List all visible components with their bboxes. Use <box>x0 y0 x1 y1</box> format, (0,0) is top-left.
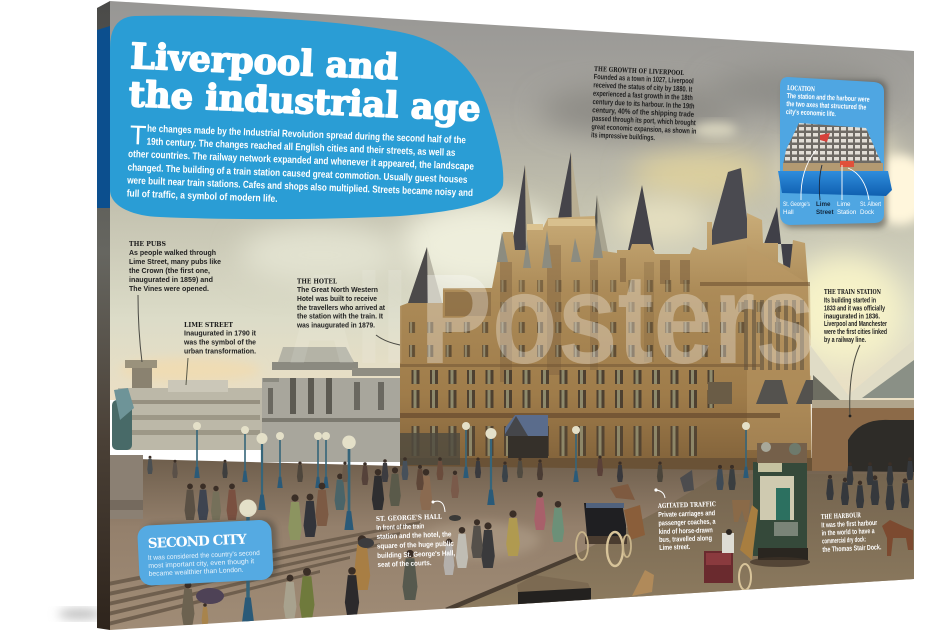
horses <box>610 470 913 596</box>
text block: agitated traffic: Private carriages and <box>658 508 715 519</box>
introduction text: 19th century. The changes reached all English cities and their streets, as well as <box>146 137 456 159</box>
location text: city's economic life. <box>786 107 836 118</box>
second city text <box>148 550 261 578</box>
text block: the growth of Liverpool: century, 40% of the shipping trade <box>592 105 694 119</box>
map of the city <box>778 123 892 196</box>
heading: the industrial age <box>128 74 481 130</box>
text block: agitated traffic: bus, travelled along <box>659 533 712 544</box>
map labels <box>783 201 881 216</box>
text block: the harbour: in the world to have a <box>821 526 876 537</box>
text block: the pubs: the Crown (the first one, <box>129 266 210 275</box>
text block: St. George's Hall: In front of the train <box>376 521 424 532</box>
umbrellas <box>196 588 224 604</box>
canvas side edge <box>97 1 110 630</box>
text block: the growth of Liverpool: received the status of city by 1880. It <box>593 80 693 94</box>
watermark <box>290 275 810 364</box>
text block: the train station: THE TRAIN STATION <box>824 288 881 296</box>
text block: Lime Street <box>183 321 257 356</box>
horse-drawn tram <box>750 442 810 567</box>
text block: St. George's Hall: building St. George's Hall, <box>377 548 455 560</box>
text block: Lime Street: was the symbol of the <box>183 338 256 346</box>
location text <box>786 84 870 120</box>
text block: the harbour: It was the first harbour <box>821 518 878 529</box>
introduction text: he changes made by the Industrial Revolution spread during the second half of the <box>147 124 466 146</box>
text block: Lime Street: LIME STREET <box>184 321 233 329</box>
St George's Hall building <box>262 347 402 462</box>
text block: St. George's Hall: station and the hotel, the <box>376 529 452 541</box>
text block: St. George's Hall: square of the huge public <box>377 539 454 550</box>
text block: agitated traffic <box>657 500 717 552</box>
red cart <box>704 505 758 590</box>
text block: the growth of Liverpool: Founded as a town in 1027, Liverpool <box>594 72 694 86</box>
map callout lines <box>801 150 869 200</box>
entrance canopy <box>505 415 548 436</box>
location text: The station and the harbour were <box>787 91 870 104</box>
map labels: Dock <box>860 209 875 216</box>
watermark: All <box>288 248 408 391</box>
text block: the hotel: was inaugurated in 1879. <box>296 320 375 330</box>
watermark: Posters <box>420 248 815 391</box>
introduction text: were built near train stations. Cafes and shops also multiplied. Streets became noisy and <box>126 175 473 199</box>
introduction text <box>126 120 476 212</box>
heading <box>128 36 483 130</box>
text block: St. George's Hall: seat of the courts. <box>377 558 432 569</box>
text block: agitated traffic: kind of horse-drawn <box>659 525 713 536</box>
map labels: Street <box>816 209 834 216</box>
steps <box>108 521 420 626</box>
street lamps <box>193 422 750 622</box>
text block: the growth of Liverpool: its impressive buildings. <box>591 130 655 142</box>
white terrace building and tower <box>118 360 263 450</box>
windows <box>404 322 804 333</box>
text block: the pubs: Lime Street, many pubs like <box>129 257 221 266</box>
text block: the growth of Liverpool: experienced a fast growth in the 18th <box>593 89 693 102</box>
map labels: Station <box>837 209 857 216</box>
text block: the hotel: the station with the train. It <box>297 312 383 320</box>
text block: agitated traffic: passenger coaches, a <box>658 517 716 527</box>
text block: the pubs: inaugurated in 1859) and <box>129 275 213 284</box>
text block: St. George's Hall <box>376 512 456 569</box>
text block: the hotel <box>296 278 385 330</box>
map labels: St. Albert <box>860 201 881 208</box>
introduction text: T <box>129 120 147 151</box>
text block: St. George's Hall: ST. GEORGE'S HALL <box>376 513 442 523</box>
motor car <box>517 575 591 606</box>
map labels: St. George's <box>783 201 810 208</box>
second city text: most important city, even though it <box>148 558 254 570</box>
text block: the harbour: THE HARBOUR <box>821 511 861 521</box>
text block: the harbour <box>821 510 882 554</box>
panel: title and introduction <box>110 16 503 219</box>
introduction text: other countries. The railway network expanded and whenever it appeared, the landscape <box>128 149 474 173</box>
text block: the train station: Liverpool and Manchester <box>824 319 887 328</box>
text block: the hotel: THE HOTEL <box>297 278 337 286</box>
text block: agitated traffic: Lime street. <box>659 542 690 552</box>
text block: the train station: Its building started in <box>824 296 876 304</box>
text block: the train station: inaugurated in 1836. <box>824 312 880 320</box>
panel: location map <box>778 77 892 228</box>
text block: the growth of Liverpool: passed through its port, which brought <box>592 114 696 127</box>
cast shadow <box>58 609 102 619</box>
crowd of pedestrians <box>147 455 913 626</box>
ground <box>100 458 914 632</box>
map labels: Lime <box>837 201 851 208</box>
text block: the growth of Liverpool: great economic expansion, as shown in <box>591 122 697 136</box>
introduction text: full of traffic, a symbol of modern life. <box>126 188 278 205</box>
text block: the pubs: As people walked through <box>129 248 216 257</box>
text block: the train station: by a railway line. <box>824 335 866 344</box>
map labels: Hall <box>783 209 794 216</box>
text block: the train station: were the first cities linked <box>823 327 887 336</box>
train station arches <box>810 340 917 474</box>
text block: agitated traffic: AGITATED TRAFFIC <box>657 500 716 510</box>
second city heading: SECOND CITY <box>147 532 247 552</box>
pointer lines <box>138 295 860 512</box>
second city text: became wealthier than London. <box>148 567 244 578</box>
horse carriage <box>576 503 645 566</box>
text block: the hotel: The Great North Western <box>297 285 378 294</box>
text block: the growth of Liverpool: century due to its harbour. In the 19th <box>592 97 695 111</box>
map labels: Lime <box>816 201 831 208</box>
introduction text: changed. The building of a train station caused great commotion. Usually guest houses <box>127 162 468 186</box>
location text: LOCATION <box>787 84 815 93</box>
text block: the train station: 1833 and it was officially <box>824 304 886 312</box>
text block: the growth of Liverpool: THE GROWTH OF LIVERPOOL <box>594 65 684 77</box>
text block: the harbour: commercial dry dock: <box>822 534 866 545</box>
text block: the pubs: THE PUBS <box>129 240 166 248</box>
text block: the pubs: The Vines were opened. <box>129 284 209 293</box>
text block: the pubs <box>129 240 221 293</box>
text block: the train station <box>823 288 887 344</box>
location text: the two axes that structured the <box>786 99 867 112</box>
text block: the growth of Liverpool <box>591 65 700 144</box>
turrets <box>497 222 603 268</box>
statue and pedestal <box>110 388 143 519</box>
text block: the hotel: Hotel was built to receive <box>297 294 377 303</box>
panel: second city <box>137 518 279 586</box>
text block: Lime Street: Inaugurated in 1790 it <box>184 328 257 338</box>
sky with clouds <box>100 0 930 400</box>
Great North Western Hotel building <box>400 152 832 472</box>
heading: Liverpool and <box>130 36 399 88</box>
second city text: It was considered the country's second <box>148 550 260 562</box>
masonry <box>400 213 812 472</box>
text block: the harbour: the Thomas Stair Dock. <box>822 542 882 554</box>
text block: the hotel: the travellers who arrived at <box>297 303 385 312</box>
spires <box>407 152 794 306</box>
text block: Lime Street: urban transformation. <box>184 346 256 356</box>
